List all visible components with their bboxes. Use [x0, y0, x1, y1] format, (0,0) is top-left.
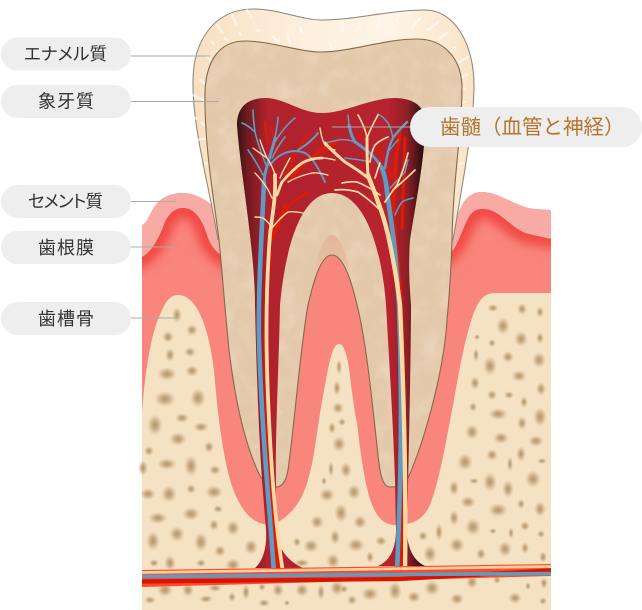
pulp chamber and canals: [237, 98, 425, 568]
dentin mottled texture: [200, 35, 465, 490]
label: alveolar bone: [1, 302, 131, 335]
label: cementum: セメント質: [28, 192, 103, 212]
enamel white flecks: [193, 10, 468, 164]
nerves (cream): [253, 115, 415, 572]
label: enamel: エナメル質: [24, 44, 107, 64]
periodontal ligament base: [142, 208, 551, 300]
label: pulp: [410, 107, 642, 147]
label: enamel: [1, 38, 131, 70]
label: cementum: [1, 185, 131, 218]
label: dentin: 象牙質: [38, 92, 94, 112]
veins (blue): [242, 110, 413, 574]
bone spots: [138, 303, 548, 607]
furcation cap: [313, 235, 351, 275]
alveolar bone: [142, 293, 551, 610]
label: periodontal ligament: 歯根膜: [38, 238, 94, 258]
arteries (red): [265, 122, 405, 572]
label: alveolar bone: 歯槽骨: [38, 309, 94, 329]
gum pale outer layer: [142, 192, 551, 262]
gum red band: [132, 208, 565, 262]
label: periodontal ligament: [1, 231, 131, 264]
horizontal blood vessels and nerve: [142, 564, 551, 587]
label: pulp: 歯髄（血管と神経）: [440, 116, 624, 139]
dentin: [200, 35, 465, 490]
enamel: [193, 9, 474, 240]
gum tissue: [132, 192, 565, 535]
leader lines: [131, 56, 412, 318]
label: dentin: [1, 85, 131, 118]
